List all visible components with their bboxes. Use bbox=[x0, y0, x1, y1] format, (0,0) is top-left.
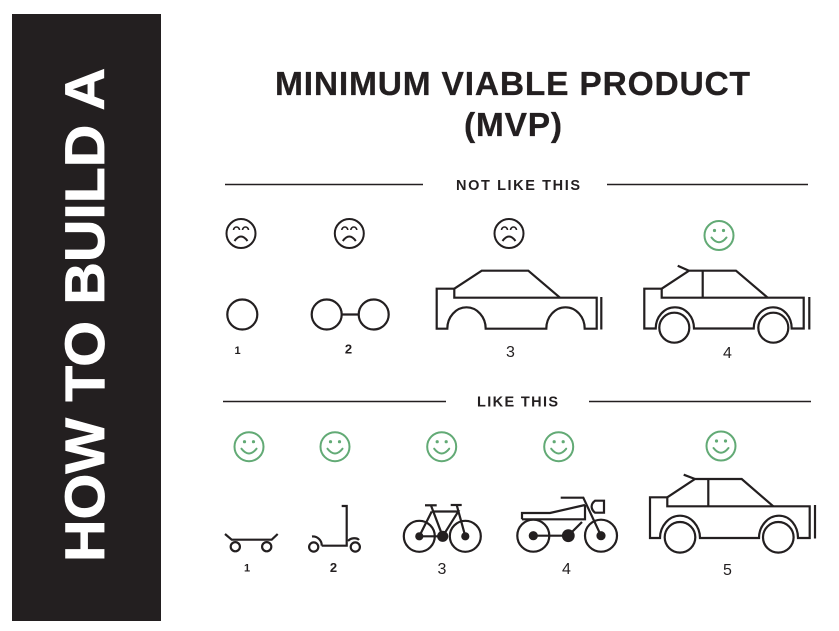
title bbox=[275, 66, 751, 144]
icon: two wheels with axle bbox=[312, 300, 389, 330]
section heading: like this: LIKE THIS bbox=[477, 394, 558, 410]
side banner bbox=[12, 14, 161, 621]
icon: happy face 3 bbox=[427, 432, 456, 461]
icon: happy face 2 bbox=[320, 432, 350, 461]
step numbers: second row bbox=[244, 560, 732, 579]
step numbers: second row: 1 bbox=[244, 562, 250, 574]
step numbers: first row: 2 bbox=[345, 342, 352, 356]
icon: sad face 2 bbox=[335, 219, 364, 248]
icon: happy face 4 bbox=[704, 221, 734, 250]
icon: happy face 5 bbox=[706, 432, 736, 460]
icon: car body without wheels bbox=[437, 271, 601, 330]
icon: bicycle bbox=[404, 505, 481, 552]
step numbers: first row: 4 bbox=[723, 345, 732, 362]
step numbers: first row bbox=[234, 342, 732, 362]
title: MINIMUM VIABLE PRODUCT bbox=[275, 66, 751, 103]
step numbers: second row: 5 bbox=[723, 562, 732, 579]
step numbers: first row: 3 bbox=[506, 344, 515, 361]
icon: single wheel bbox=[227, 300, 257, 330]
icon: skateboard bbox=[225, 534, 278, 551]
step numbers: first row: 1 bbox=[234, 345, 241, 357]
icon: complete car 4 bbox=[644, 266, 809, 343]
icon: sad face 3 bbox=[494, 219, 524, 248]
icon: scooter bbox=[309, 506, 360, 552]
icon: happy face 1 bbox=[234, 432, 264, 461]
icon: complete car 5 bbox=[650, 475, 815, 553]
banner heading: HOW TO BUILD A bbox=[53, 68, 116, 562]
icon: happy face 4 bbox=[544, 432, 573, 461]
icon: sad face 1 bbox=[226, 219, 256, 248]
section heading: not like this: NOT LIKE THIS bbox=[456, 178, 580, 194]
step numbers: second row: 3 bbox=[438, 561, 447, 578]
step numbers: second row: 2 bbox=[330, 560, 337, 575]
title: (MVP) bbox=[464, 107, 562, 144]
icon: motorbike bbox=[517, 498, 617, 552]
step numbers: second row: 4 bbox=[562, 561, 571, 578]
